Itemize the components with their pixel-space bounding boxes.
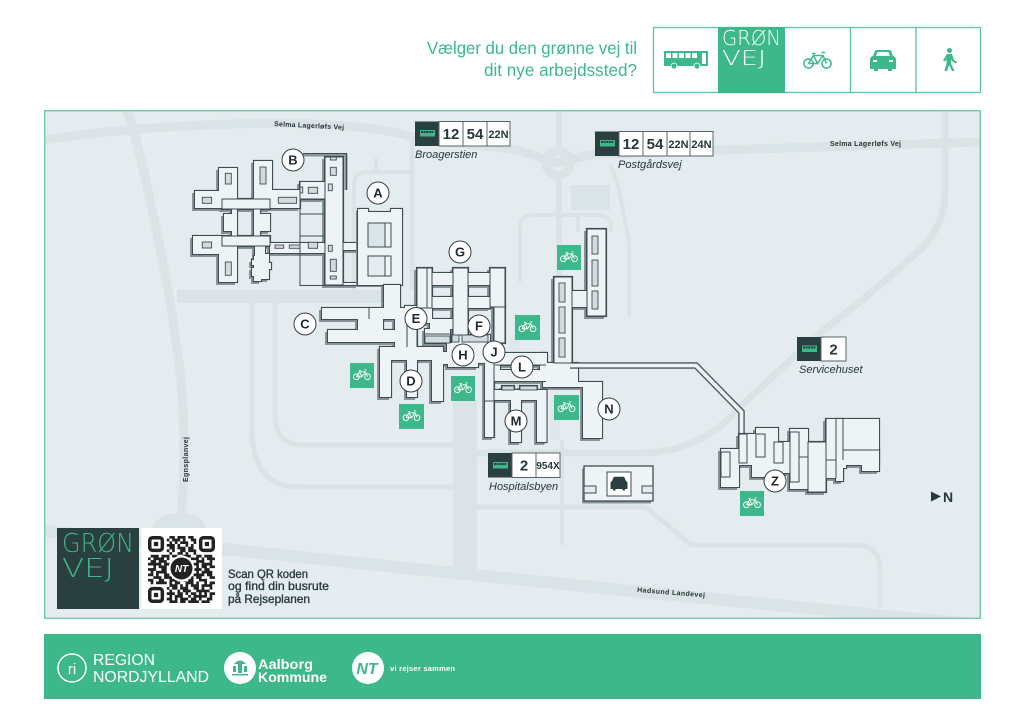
building letters: A <box>373 186 383 200</box>
logo: NT vi rejser sammen: NT <box>356 661 379 678</box>
icon: bicycle <box>804 52 831 68</box>
bus stop: Postgårdsvej: 54 <box>647 136 664 153</box>
building letters: N <box>604 402 614 416</box>
bus stop: Servicehuset: 2 <box>829 342 838 358</box>
building complex Z <box>718 419 879 494</box>
bridge inner walkway <box>570 366 742 436</box>
bus stop: Broagerstien: 12 <box>443 126 459 143</box>
road network <box>44 110 981 625</box>
Grøn Vej logo block: GRØN <box>62 529 134 559</box>
building letters: F <box>475 318 483 334</box>
bus stop: Broagerstien <box>415 122 510 161</box>
bus stop: Servicehuset: Servicehuset <box>799 364 864 376</box>
QR instructions text: på Rejseplanen <box>228 592 310 606</box>
building letters: J <box>490 344 498 360</box>
logo: Aalborg Kommune <box>224 652 327 685</box>
bicycle parking markers <box>350 245 764 516</box>
logo: Region Nordjylland <box>58 652 209 686</box>
top-left question heading: Vælger du den grønne vej til <box>427 38 637 58</box>
logo: Aalborg Kommune: Aalborg <box>258 656 313 672</box>
building letters: M <box>511 414 521 428</box>
QR instructions text: Scan QR koden <box>228 567 308 581</box>
road label: Hadsund Landevej: Hadsund Landevej <box>637 587 705 599</box>
bus stop: Postgårdsvej: Postgårdsvej <box>618 159 682 171</box>
map panel <box>44 110 981 625</box>
Grøn Vej logo block <box>57 528 139 609</box>
building letters: B <box>288 152 298 168</box>
central hospital buildings C to N <box>320 229 606 444</box>
icon: pedestrian <box>943 48 957 71</box>
bus stop: Postgårdsvej: 22N <box>668 139 689 151</box>
building letters: E <box>412 311 421 326</box>
bus stop: Hospitalsbyen: 954X <box>536 461 560 472</box>
covered bridge to building Z <box>570 366 742 436</box>
building letters: H <box>458 348 468 362</box>
icon: bus <box>664 51 708 69</box>
QR centre NT badge: NT <box>175 564 189 575</box>
logo: Aalborg Kommune: Kommune <box>258 669 327 685</box>
building letters <box>288 152 779 488</box>
Grøn Vej logo block: VEJ <box>62 554 114 584</box>
mode: Grøn Vej active tab: VEJ <box>722 46 766 70</box>
icon: car <box>870 50 896 71</box>
bus stop: Servicehuset <box>797 337 864 376</box>
road label: Selma Lagerløfs Vej west: Selma Lagerløfs Vej <box>274 121 344 132</box>
bus stop: Postgårdsvej: 24N <box>691 139 712 151</box>
bus stop: Postgårdsvej <box>595 132 713 171</box>
building complex B <box>190 154 358 288</box>
logo: NT vi rejser sammen: vi rejser sammen <box>390 664 455 673</box>
north arrow <box>931 489 953 505</box>
logo: NT vi rejser sammen <box>352 652 455 684</box>
top-left question heading: dit nye arbejdssted? <box>484 60 637 80</box>
building letters: D <box>406 374 416 388</box>
north arrow: N <box>943 489 953 505</box>
building letters: G <box>455 244 465 260</box>
logo: Region Nordjylland: REGION <box>93 652 155 669</box>
bus stop: Broagerstien: 22N <box>488 129 509 141</box>
footer logo band <box>44 634 981 699</box>
building letters: C <box>300 316 310 332</box>
parking house <box>582 466 653 504</box>
mode: Grøn Vej active tab: GRØN <box>722 26 781 50</box>
building A <box>356 209 402 287</box>
road label: Egnsplanvej: Egnsplanvej <box>183 437 190 482</box>
bus stop: Postgårdsvej: 12 <box>623 136 639 153</box>
building letters: L <box>518 360 526 374</box>
building letters: Z <box>771 474 779 488</box>
logo: Region Nordjylland: NORDJYLLAND <box>93 669 209 686</box>
bus stop: Broagerstien: 54 <box>467 126 484 143</box>
QR code <box>141 528 222 609</box>
bus stop: Hospitalsbyen <box>488 453 560 493</box>
road label: Selma Lagerløfs Vej east: Selma Lagerløfs Vej <box>830 141 901 148</box>
logo: Region Nordjylland: ri <box>68 661 76 678</box>
building letter markers <box>282 149 786 492</box>
QR instructions text: og find din busrute <box>228 579 329 593</box>
transport mode selector <box>654 26 980 93</box>
top-left question heading <box>427 38 637 80</box>
mode: Grøn Vej active tab <box>718 26 785 93</box>
QR instructions text <box>228 567 329 606</box>
bus stop: Hospitalsbyen: 2 <box>520 458 528 474</box>
icon: car <box>610 477 628 490</box>
bus stop: Hospitalsbyen: Hospitalsbyen <box>489 481 558 493</box>
bus stop: Broagerstien: Broagerstien <box>415 149 477 161</box>
